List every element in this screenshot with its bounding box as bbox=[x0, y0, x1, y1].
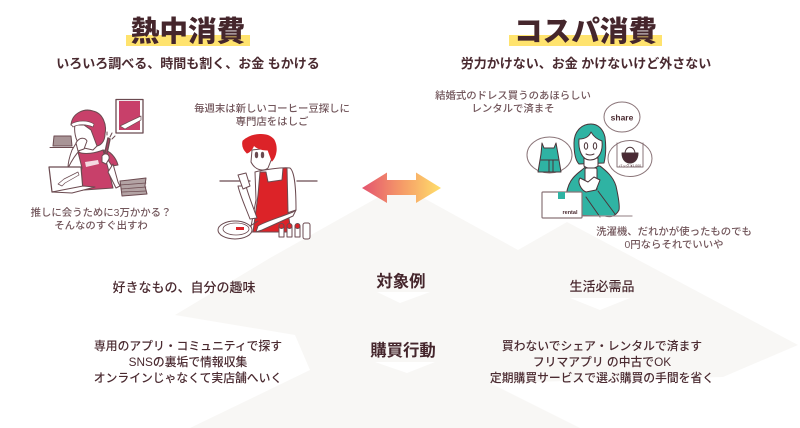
row label: 対象例: 対象例 bbox=[376, 273, 426, 291]
caption: coffee: 毎週末は新しいコーヒー豆探しに bbox=[194, 104, 350, 115]
caption: coffee bbox=[194, 103, 350, 128]
icon: woman with smartphone and rental box illustration: share bbox=[611, 112, 634, 122]
caption: oshi: そんなのすぐ出すわ bbox=[54, 221, 148, 232]
caption: washing machine: 洗濯機、だれかが使ったものでも bbox=[596, 227, 752, 238]
row label: 購買行動: 購買行動 bbox=[370, 342, 436, 360]
caption: dress rental: レンタルで済まそ bbox=[471, 104, 555, 115]
right behaviors: 買わないでシェア・レンタルで済ます bbox=[502, 339, 702, 353]
heading text: 熱中消費 bbox=[131, 16, 245, 48]
caption: oshi bbox=[30, 207, 171, 232]
right behaviors: 定期購買サービスで選ぶ購買の手間を省く bbox=[490, 371, 714, 385]
left target: 好きなもの、自分の趣味 bbox=[112, 280, 256, 295]
caption: oshi: 推しに会うために3万かかる？ bbox=[31, 208, 171, 219]
right target: 生活必需品 bbox=[569, 279, 634, 294]
left behaviors bbox=[94, 339, 282, 385]
left behaviors: 専用のアプリ・コミュニティで探す bbox=[94, 339, 282, 353]
left behaviors: オンラインじゃなくて実店舗へいく bbox=[94, 371, 282, 385]
icon: woman with smartphone and rental box illustration: バッグ ¥1,000 bbox=[619, 163, 641, 168]
subtitle left: いろいろ調べる、時間も割く、お金 もかける bbox=[56, 56, 320, 71]
title: コスパ消費 bbox=[509, 16, 662, 48]
caption: dress rental: 結婚式のドレス買うのあほらしい bbox=[435, 91, 591, 102]
subtitle right: 労力かけない、お金 かけないけど外さない bbox=[461, 56, 711, 71]
left behaviors: SNSの裏垢で情報収集 bbox=[129, 355, 247, 369]
caption: dress rental bbox=[435, 90, 591, 115]
heading text right: コスパ消費 bbox=[514, 16, 657, 48]
title: 熱中消費 bbox=[126, 16, 250, 48]
right behaviors: フリマアプリ の中古でOK bbox=[533, 355, 671, 369]
icon: woman with smartphone and rental box illustration: rental bbox=[563, 210, 578, 216]
highlight: yellow marker right bbox=[509, 35, 662, 46]
highlight: yellow marker bbox=[126, 35, 250, 46]
caption: coffee: 専門店をはしご bbox=[236, 117, 308, 128]
caption: washing machine: 0円ならそれでいいや bbox=[624, 240, 723, 251]
right behaviors bbox=[490, 339, 714, 385]
caption: washing machine bbox=[596, 226, 752, 251]
